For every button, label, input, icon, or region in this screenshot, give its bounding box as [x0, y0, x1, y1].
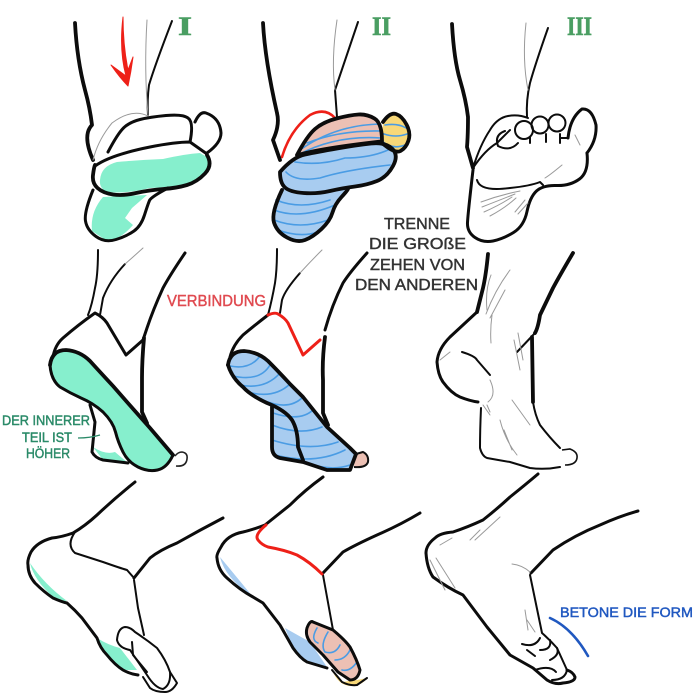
- panel: row 1 step III, finished foot: [452, 12, 596, 242]
- arrow: red downward arrow: [111, 17, 133, 86]
- foot outline: [28, 482, 223, 692]
- teal fill: heel: [92, 195, 147, 241]
- foot line art: [452, 23, 596, 242]
- callout: inner part note: [2, 412, 100, 461]
- blue fill: ball: [280, 143, 396, 193]
- red connection line: [282, 112, 335, 157]
- heading: I: I: [178, 12, 192, 41]
- pink fill: toe mound: [297, 114, 382, 155]
- pink fill: toes: [307, 622, 360, 680]
- panel: row 3 step I, front side view with teal: [28, 482, 223, 692]
- text block: separate big toe note: ZEHEN VON: [370, 257, 465, 274]
- label: Verbindung: VERBINDUNG: [167, 293, 266, 310]
- yellow fill: big toe: [382, 114, 409, 152]
- yellow fill: toe tip: [332, 670, 367, 686]
- leader line: [78, 435, 100, 438]
- panel: row 3 step II, front side view with colours: [217, 477, 420, 686]
- heading: II: II: [372, 12, 391, 41]
- text block: separate big toe note: [355, 216, 478, 294]
- callout: inner part note: HÖHER: [26, 444, 70, 461]
- text block: separate big toe note: DIE GROßE: [369, 236, 466, 253]
- foot outline: [228, 249, 368, 470]
- foot outline: [50, 248, 187, 471]
- hatching: [481, 135, 580, 216]
- red connection line: [268, 313, 320, 355]
- callout: inner part note: TEIL IST: [22, 429, 72, 445]
- foot outline: [263, 20, 409, 241]
- foot outline: [75, 20, 221, 241]
- heading: III: III: [567, 12, 592, 41]
- panel: row 2 step III, finished side view: [437, 253, 577, 469]
- text block: separate big toe note: TRENNE: [384, 216, 450, 233]
- note text: BETONE DIE FORM: [560, 604, 693, 620]
- curved emphasis stroke: [550, 618, 588, 656]
- callout: emphasise form: [550, 604, 693, 656]
- red connection line: [257, 525, 322, 574]
- pink fill: toe: [354, 452, 368, 467]
- blue contour lines: [230, 356, 350, 468]
- panel: row 2 step II, side view with blue sole: [228, 249, 368, 470]
- blue contour lines: [314, 628, 357, 670]
- blue contour lines: [274, 124, 407, 235]
- text block: separate big toe note: DEN ANDEREN: [355, 277, 478, 294]
- foot outline: [217, 477, 420, 685]
- teal fill: sole: [50, 350, 173, 471]
- teal fill: ball of foot: [100, 153, 208, 192]
- panel: row 3 step III, finished view: [426, 474, 638, 684]
- teal fills: [30, 563, 137, 670]
- panel: row 2 step I, side view with teal sole: [50, 248, 187, 471]
- panel: row 1 step II, coloured forms: [263, 12, 409, 241]
- blue fill: heel: [273, 187, 348, 241]
- blue fills: [220, 557, 327, 667]
- panel: row 1 step I, foot from below: [75, 12, 221, 241]
- teal fill: inner edge: [93, 447, 128, 463]
- blue fill: sole: [228, 351, 355, 470]
- note text: DER INNERER: [2, 412, 90, 428]
